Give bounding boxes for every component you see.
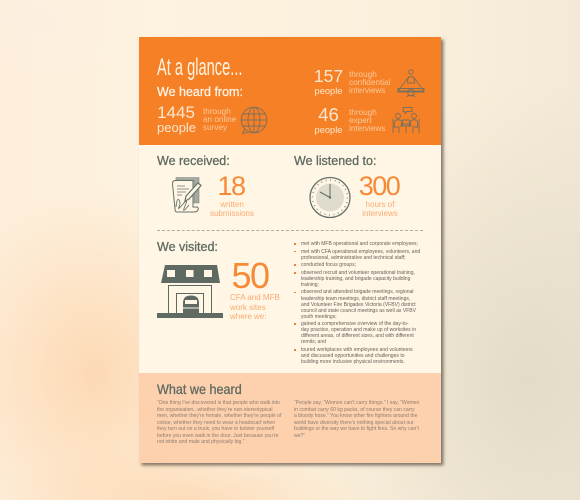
stat: 1445 people: 1445	[157, 103, 195, 122]
quote: left: they turn out on a truck, you have to bolster yourself	[157, 426, 274, 432]
stat: 1445 people: people	[157, 120, 196, 135]
icon: expert interview	[392, 107, 420, 133]
quote: right: in combat carry 60 kg packs, of course they can carry	[294, 407, 415, 413]
quote: right: world have diversity there’s nothing special about our	[294, 420, 414, 426]
quote: right: buildings or the way we have to fight fires. So why can’t	[294, 426, 419, 432]
quote: left: “One thing I’ve discovered is that people who walk into	[157, 400, 280, 406]
text: through confidential interviews: confidential	[349, 78, 390, 87]
list: visit activities: remits; and	[301, 339, 326, 345]
list: visit activities: met with MFB operational and corporate employees;	[301, 241, 418, 247]
number: 300: 300	[359, 171, 399, 201]
caption: written submissions: written	[220, 200, 244, 208]
heading: we visited: We visited:	[157, 240, 218, 254]
quote: right: we?”	[294, 433, 305, 439]
icon: globe speech bubble	[240, 106, 268, 134]
stat: 46 people	[315, 104, 342, 135]
stat: 50 work sites	[230, 255, 280, 321]
caption: CFA and MFB work sites where we: CFA and MFB	[230, 293, 280, 302]
stat: 1445 people	[157, 103, 196, 135]
heading: we received: We received:	[157, 154, 230, 168]
list: visit activities: gained a comprehensive overview of the day-to-	[301, 321, 408, 327]
stat: 157 people	[314, 66, 343, 96]
heading: what we heard: What we heard	[157, 381, 242, 397]
stat: 18 written submissions	[210, 171, 254, 218]
stat: 157 people: people	[315, 86, 342, 96]
icon: written submission	[172, 177, 202, 212]
panel: at a glance	[139, 37, 441, 145]
quote: right	[294, 400, 419, 439]
stat: 46 people: people	[315, 124, 342, 134]
list: visit activities: leadership team meetings, district staff meetings,	[301, 296, 410, 302]
caption: written submissions	[210, 200, 254, 218]
list: visit activities: leadership training, and brigade capacity building	[301, 276, 410, 282]
list: visit activities: and Volunteer Fire Brigades Victoria (VFBV) district	[301, 302, 416, 308]
quote: left: the organisation...whether they’re non-stereotypical	[157, 407, 273, 413]
list: visit activities: training;	[301, 282, 319, 288]
list: visit activities: professional, administrative and technical staff;	[301, 255, 406, 261]
list: visit activities	[294, 241, 420, 365]
icon: confidential interview	[397, 69, 425, 97]
heading: we listened to: We listened to:	[294, 154, 376, 168]
list: visit activities: council and state council meetings as well as VFBV	[301, 308, 416, 314]
list: visit activities: different areas, of different sizes, and with different	[301, 333, 414, 339]
stat: 300 hours of interviews	[359, 171, 400, 218]
quote: left: colour, whether they need to wear a headscarf when	[157, 420, 275, 426]
quote: left: men, whether they’re female, whether they’re people of	[157, 413, 281, 419]
caption: hours of interviews	[362, 200, 398, 218]
number: 18: 18	[217, 171, 245, 201]
text: through expert interviews: expert	[349, 116, 372, 125]
list: visit activities: conducted focus groups;	[301, 262, 356, 268]
text: through confidential interviews: interviews	[349, 86, 385, 95]
icon: fire station	[157, 265, 223, 318]
caption: hours of interviews: hours of	[366, 200, 394, 208]
title: At a glance...	[157, 54, 242, 81]
quote: right: “People say, “Women can’t carry things.” I say, “Women	[294, 400, 419, 406]
quote: left: before you even walk in the door. Just because you’re	[157, 433, 278, 439]
caption: written submissions: submissions	[210, 209, 254, 218]
text: through confidential interviews	[349, 70, 390, 95]
caption: CFA and MFB work sites where we: work sites	[230, 303, 266, 312]
quote: left	[157, 400, 282, 445]
caption: CFA and MFB work sites where we: where we:	[230, 312, 266, 321]
list: visit activities: toured workplaces with employees and volunteers	[301, 347, 413, 353]
list: visit activities: youth meetings;	[301, 314, 337, 320]
text: through an online survey: survey	[203, 123, 227, 132]
list: visit activities: building more inclusive physical environments.	[301, 359, 405, 365]
list: visit activities: and discussed opportunities and challenges to	[301, 353, 405, 359]
text: through an online survey: through	[203, 107, 231, 116]
number: 50: 50	[231, 255, 269, 296]
quote: left: not white and male and physically big.”	[157, 439, 244, 445]
text: through confidential interviews: through	[349, 70, 377, 79]
list: visit activities: observed and attended brigade meetings, regional	[301, 289, 414, 295]
infographic sheet	[139, 37, 441, 463]
caption: CFA and MFB work sites where we	[230, 293, 280, 321]
list: visit activities: observed recruit and volunteer operational training,	[301, 270, 415, 276]
quote: right: a bloody hose.” You know other fire fighters around the	[294, 413, 417, 419]
list: visit activities: met with CFA operational employees, volunteers, and	[301, 249, 420, 255]
list: visit activities: day practice, operation and make up of worksites in	[301, 327, 416, 333]
text: through an online survey	[203, 107, 236, 132]
caption: hours of interviews: interviews	[362, 209, 398, 218]
text: through an online survey: an online	[203, 115, 236, 124]
text: through expert interviews	[349, 108, 386, 133]
heading: we heard from: We heard from:	[157, 85, 243, 99]
text: through expert interviews: interviews	[349, 124, 385, 133]
stat: 46 people: 46	[318, 104, 339, 125]
stat: 157 people: 157	[314, 66, 343, 86]
text: through expert interviews: through	[349, 108, 377, 117]
icon: clock	[309, 176, 351, 218]
panel: what we heard	[139, 373, 441, 463]
